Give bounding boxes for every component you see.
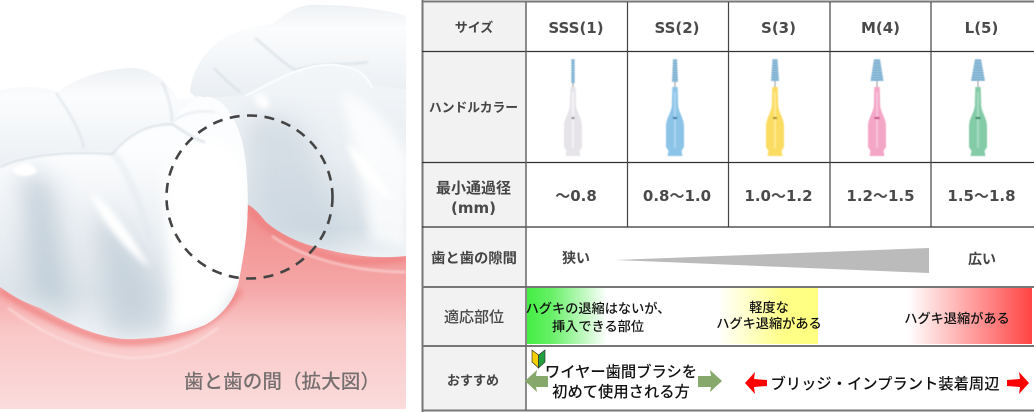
red band <box>908 288 1032 344</box>
brush: white <box>564 59 582 156</box>
row: recommended <box>447 350 1029 401</box>
row: recommended: おすすめ <box>447 373 499 388</box>
row: minimum diameter: 1.0～1.2 <box>744 187 813 205</box>
row: size <box>455 19 998 37</box>
row: gap between teeth <box>431 248 996 273</box>
row: size: SSS(1) <box>548 19 604 37</box>
row: minimum diameter: 1.2～1.5 <box>846 187 915 205</box>
row: recommended: 初めて使用される方 <box>552 384 690 401</box>
icon: beginner mark <box>532 350 545 368</box>
row: applicable area <box>444 288 1032 344</box>
yellow band <box>718 288 818 344</box>
brush: blue <box>666 59 684 156</box>
row: applicable area: 適応部位 <box>444 308 504 326</box>
header column background <box>423 3 526 410</box>
arrow: green right <box>698 370 722 392</box>
back tooth rear lobes <box>186 5 410 100</box>
front tooth rear lobes <box>0 68 202 165</box>
row: size: M(4) <box>861 19 900 37</box>
back tooth shading <box>245 115 350 255</box>
row: recommended: ワイヤー歯間ブラシを <box>545 363 697 381</box>
row: gap between teeth: 狭い <box>562 250 590 266</box>
brush: pink <box>868 59 886 156</box>
arrow: green left <box>525 370 548 392</box>
caption: 歯と歯の間（拡大図） <box>184 371 380 393</box>
row: size: S(3) <box>761 19 796 37</box>
row: handle colour <box>429 59 987 156</box>
row: minimum diameter: 0.8～1.0 <box>643 187 711 205</box>
green band <box>527 288 607 344</box>
gum ridge highlights <box>8 236 406 358</box>
dashed circle <box>166 116 332 278</box>
panel: enlarged tooth illustration <box>0 0 410 409</box>
row: minimum diameter: 1.5～1.8 <box>947 187 1016 205</box>
gum shadow under teeth <box>0 208 406 342</box>
row: applicable area: 軽度な <box>749 300 789 315</box>
front tooth <box>0 90 260 345</box>
brush: green <box>969 59 987 156</box>
row: applicable area: 挿入できる部位 <box>552 319 644 334</box>
row: minimum diameter: 最小通過径 <box>436 180 511 197</box>
wedge <box>616 248 929 273</box>
row: gap between teeth: 歯と歯の隙間 <box>431 249 517 267</box>
row: size: サイズ <box>455 20 493 35</box>
row: minimum diameter: (mm) <box>451 199 496 217</box>
grid lines <box>422 0 1034 412</box>
gum <box>0 190 406 409</box>
arrow: red right <box>1007 372 1029 394</box>
row: gap between teeth: 広い <box>968 251 996 267</box>
row: size: L(5) <box>965 19 998 37</box>
row: recommended: ブリッジ・インプラント装着周辺 <box>770 375 1000 393</box>
brush: yellow <box>766 59 784 156</box>
row: applicable area: ハグキ退縮がある <box>904 310 1010 326</box>
arrow: red left <box>745 372 767 394</box>
row: applicable area: ハグキの退縮はないが、 <box>526 300 670 316</box>
row: minimum diameter: ～0.8 <box>555 187 597 205</box>
row: applicable area: ハグキ退縮がある <box>716 315 822 331</box>
table <box>422 0 1034 412</box>
row: size: SS(2) <box>654 19 700 37</box>
row: minimum diameter <box>436 180 1016 217</box>
back tooth <box>180 0 410 262</box>
row: handle colour: ハンドルカラー <box>429 100 518 115</box>
